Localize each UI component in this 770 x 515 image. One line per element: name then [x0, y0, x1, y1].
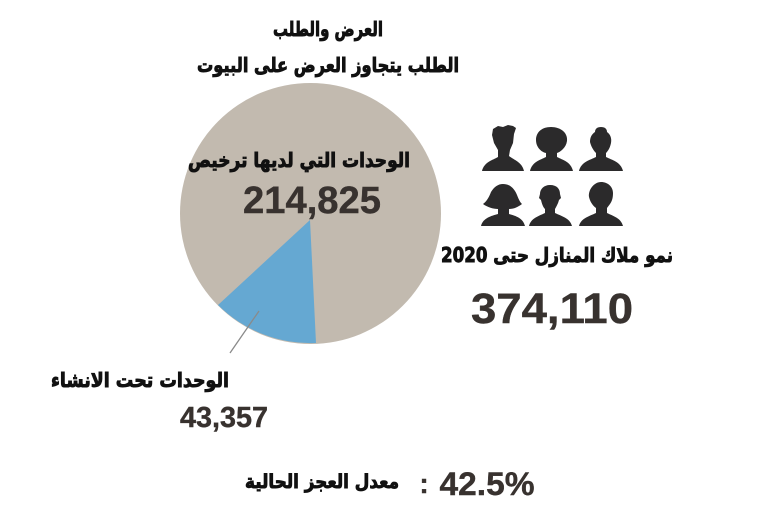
icon group: home owners [481, 125, 623, 226]
number: home owners: 374,110 [471, 285, 633, 333]
icon: person 1 [482, 125, 524, 171]
deficit rate [245, 466, 534, 502]
title: الطلب يتجاوز العرض على البيوت [197, 53, 459, 77]
label: home owner growth: نمو ملاك المنازل حتى 2020 [441, 243, 673, 267]
title: العرض والطلب [273, 17, 383, 41]
deficit rate: معدل العجز الحالية [245, 471, 399, 493]
icon: person 6 [579, 182, 623, 226]
number: units under construction: 43,357 [180, 402, 268, 434]
pie slice: units under construction [218, 220, 316, 343]
icon: person 2 [530, 127, 573, 171]
title [197, 17, 459, 77]
label: licensed units: 214,825 [243, 180, 381, 222]
icon: person 3 [579, 127, 623, 171]
icon: person 4 [481, 184, 525, 226]
label: units under construction: الوحدات تحت الانشاء [51, 368, 229, 392]
leader line [230, 311, 259, 353]
label: licensed units: الوحدات التي لديها ترخيص [188, 148, 410, 173]
pie chart [180, 83, 441, 344]
icon: person 5 [529, 185, 572, 226]
deficit rate: : [419, 468, 429, 499]
deficit rate: 42.5% [440, 466, 534, 502]
label: licensed units [188, 148, 410, 222]
